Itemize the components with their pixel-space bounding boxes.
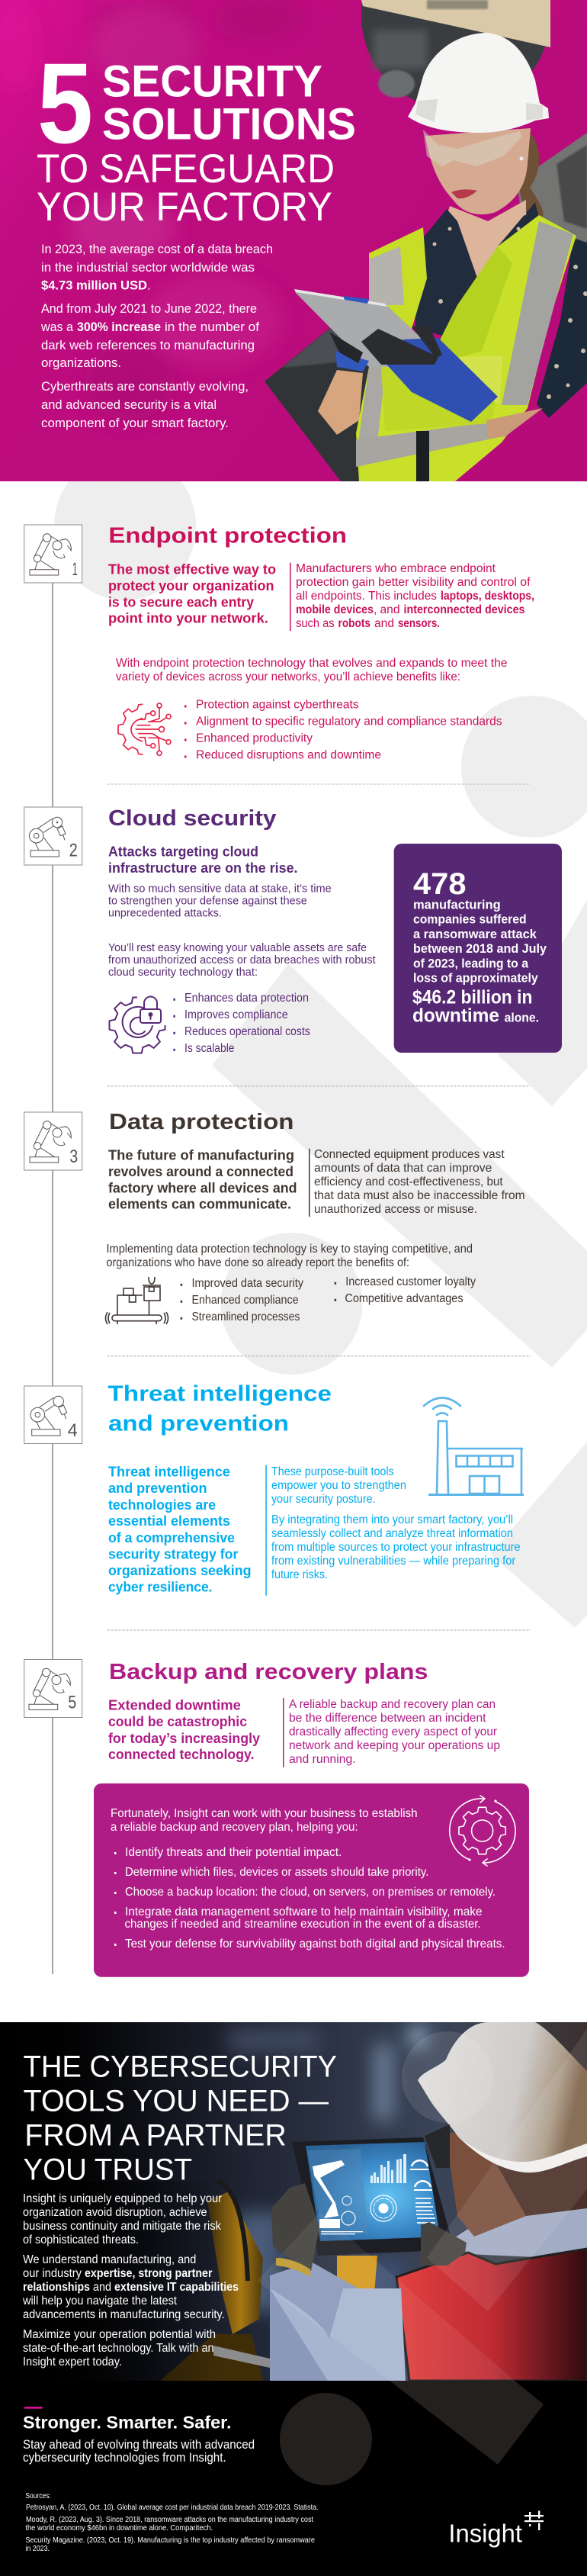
description: and running. <box>289 1753 356 1766</box>
panel: backup plan: Integrate data management software to help maintain visibility, make <box>125 1905 483 1918</box>
description <box>271 1465 521 1581</box>
lead text: revolves around a connected <box>108 1164 294 1179</box>
footer body text: organization avoid disruption, achieve <box>23 2206 207 2219</box>
description: sensors. <box>398 617 440 630</box>
helmet <box>408 33 549 133</box>
description: all endpoints. This includes <box>296 590 437 603</box>
footer body text: We understand manufacturing, and <box>23 2253 196 2266</box>
description: from multiple sources to protect your infrastructure <box>271 1541 521 1554</box>
tagline: cybersecurity technologies from Insight. <box>23 2450 226 2465</box>
hero title: YOUR FACTORY <box>37 185 332 230</box>
Insight logo: Insight <box>448 2520 522 2548</box>
description: protection gain better visibility and control of <box>296 576 531 589</box>
footer title: TOOLS YOU NEED — <box>23 2085 329 2118</box>
description: your security posture. <box>271 1493 376 1506</box>
background shapes <box>54 452 587 1628</box>
lead text: point into your network. <box>108 611 268 626</box>
panel: backup plan: a reliable backup and recovery plan, helping you: <box>111 1821 358 1834</box>
lead text: organizations seeking <box>108 1563 252 1578</box>
lead text: for today’s increasingly <box>108 1731 260 1746</box>
hero intro text: and advanced security is a vital <box>41 397 217 412</box>
section: endpoint protection <box>108 524 534 762</box>
forearms <box>318 370 363 435</box>
benefits list: Enhanced compliance <box>192 1294 299 1307</box>
description: , <box>374 603 377 616</box>
step 2 marker <box>24 807 82 865</box>
description: to strengthen your defense against these <box>108 895 307 908</box>
footer background <box>0 2022 587 2576</box>
hero title: SECURITY <box>102 56 322 107</box>
description: Manufacturers who embrace endpoint <box>296 562 496 575</box>
description: mobile devices <box>296 603 374 616</box>
lead text <box>108 562 276 626</box>
tagline: Stronger. Smarter. Safer. <box>23 2412 232 2432</box>
panel: backup plan: Test your defense for survivability against both digital and physical threats. <box>125 1938 505 1950</box>
vest and shirt <box>453 2207 587 2259</box>
panel: backup plan: Determine which files, devices or assets should take priority. <box>125 1866 428 1879</box>
hero title: SOLUTIONS <box>102 99 356 150</box>
footer body text: advancements in manufacturing security. <box>23 2308 225 2321</box>
stat callout: manufacturing <box>413 897 501 912</box>
hero photo: worker <box>294 33 587 481</box>
benefits intro <box>116 657 508 683</box>
sunglasses <box>425 2124 450 2168</box>
footer body text: relationships <box>23 2281 90 2294</box>
footer body text: expertise, strong partner <box>85 2267 212 2280</box>
tagline <box>23 2407 255 2465</box>
description: efficiency and cost-effectiveness, but <box>314 1175 503 1188</box>
lead text <box>108 844 297 876</box>
footer title: THE CYBERSECURITY <box>23 2050 337 2084</box>
lead text: Threat intelligence <box>108 1465 230 1480</box>
sleeve <box>537 238 587 418</box>
description: and <box>374 617 394 630</box>
yellow robot <box>160 2179 377 2381</box>
hero texture <box>69 0 296 415</box>
sources: Moody, R. (2023, Aug. 3). Since 2018, ransomware attacks on the manufacturing industry cost <box>26 2516 313 2524</box>
face <box>425 128 531 214</box>
benefits list: Competitive advantages <box>345 1292 464 1305</box>
lead text <box>108 1698 260 1762</box>
tablet <box>294 289 421 367</box>
stat callout: 478 <box>413 867 467 901</box>
panel: backup plan: Choose a backup location: the cloud, on servers, on premises or remotely. <box>125 1886 496 1899</box>
stat callout: companies suffered <box>413 912 527 927</box>
lead text: security strategy for <box>108 1547 238 1562</box>
shirt <box>415 209 477 336</box>
panel: backup plan: changes if needed and streamline execution in the event of a disaster. <box>125 1918 481 1931</box>
hero intro text: Cyberthreats are constantly evolving, <box>41 379 249 394</box>
description: robots <box>338 617 370 630</box>
heading <box>108 1382 332 1436</box>
description: Connected equipment produces vast <box>314 1148 505 1161</box>
section: threat intelligence and prevention <box>108 1382 521 1596</box>
benefits list: Reduces operational costs <box>184 1025 310 1038</box>
hero intro text: in the number of <box>165 320 259 334</box>
stat callout: alone. <box>505 1010 539 1024</box>
step 4 marker <box>24 1386 82 1443</box>
hair <box>520 133 543 217</box>
lead text: elements can communicate. <box>108 1197 291 1212</box>
heading: Data protection <box>109 1110 294 1134</box>
heading: and prevention <box>108 1412 289 1436</box>
lead text: is to secure each entry <box>108 595 254 610</box>
section: backup and recovery plans <box>108 1660 500 1767</box>
gloves <box>335 351 369 371</box>
lead text <box>108 1148 297 1212</box>
step 4 marker: 4 <box>68 1420 78 1441</box>
stat callout: of 2023, leading to a <box>413 957 528 971</box>
benefits list: Reduced disruptions and downtime <box>196 749 381 762</box>
benefits intro: With endpoint protection technology that evolves and expands to meet the <box>116 657 508 670</box>
benefits intro: variety of devices across your networks, you’ll achieve benefits like: <box>116 671 460 683</box>
vest <box>356 227 427 481</box>
description: laptops, desktops, <box>441 590 534 603</box>
footer body text <box>22 2192 239 2369</box>
hero intro text: $4.73 million USD <box>41 278 147 293</box>
panel: backup plan <box>94 1783 529 1977</box>
hero intro text: . <box>147 278 151 293</box>
sleeve <box>270 2262 406 2381</box>
step 1 marker <box>24 525 82 583</box>
description: You’ll rest easy knowing your valuable assets are safe <box>108 941 367 954</box>
step 5 marker <box>24 1660 82 1718</box>
description: unauthorized access or misuse. <box>314 1203 477 1216</box>
hero intro text: And from July 2021 to June 2022, there <box>41 301 257 316</box>
lead text: essential elements <box>108 1513 230 1529</box>
robot arm icon <box>32 1397 67 1436</box>
footer title <box>23 2050 337 2187</box>
hero intro text: component of your smart factory. <box>41 416 229 430</box>
benefits list <box>184 699 502 762</box>
hero intro text: in the industrial sector worldwide was <box>41 260 255 275</box>
hero intro text: dark web references to manufacturing <box>41 338 255 352</box>
description: and <box>380 603 399 616</box>
footer decorative shapes <box>280 2381 544 2485</box>
footer title: FROM A PARTNER <box>24 2119 287 2153</box>
robot arm icon <box>30 1124 71 1163</box>
description: Implementing data protection technology is key to staying competitive, and <box>107 1243 473 1256</box>
stat callout: downtime <box>412 1005 499 1026</box>
hero title: TO SAFEGUARD <box>37 146 335 191</box>
blurred factory background <box>229 2024 425 2311</box>
step 3 marker <box>24 1112 82 1170</box>
helmet <box>418 2022 587 2172</box>
robot arm icon <box>29 1671 70 1710</box>
benefits list: Is scalable <box>184 1042 235 1055</box>
sources: the world economy $46bn in downtime alone. Comparitech. <box>25 2524 213 2533</box>
step 5 marker: 5 <box>68 1692 76 1713</box>
icon: circuit gear <box>118 703 171 755</box>
hero intro text <box>40 242 273 430</box>
tablet <box>292 2137 450 2256</box>
benefits list: Improves compliance <box>184 1008 288 1021</box>
sources: Security Magazine. (2023, Oct. 19). Manufacturing is the top industry affected by ransomware <box>25 2536 315 2545</box>
sources: in 2023. <box>25 2545 50 2553</box>
lead text: connected technology. <box>108 1747 255 1762</box>
benefits list: Improved data security <box>192 1277 303 1290</box>
robot arm icon <box>30 818 66 857</box>
description: that data must also be inaccessible from <box>314 1189 525 1202</box>
benefits list: Enhances data protection <box>184 992 309 1005</box>
hero banner <box>0 0 587 481</box>
footer body text: of sophisticated threats. <box>23 2233 139 2246</box>
description: seamlessly collect and analyze threat information <box>271 1527 513 1540</box>
lead text: infrastructure are on the rise. <box>108 860 297 876</box>
footer body text: Insight expert today. <box>23 2356 122 2369</box>
footer photo: worker with tablet <box>91 2022 587 2381</box>
stat callout <box>394 844 562 1053</box>
benefits list: Protection against cyberthreats <box>196 699 359 712</box>
hero intro text: In 2023, the average cost of a data breach <box>41 242 273 256</box>
hero title <box>37 39 356 230</box>
robot arm icon <box>30 536 71 575</box>
description <box>296 562 534 630</box>
sources: Petrosyan, A. (2023, Oct. 10). Global average cost per industrial data breach 2019-2023. Statista. <box>26 2504 319 2512</box>
footer body text: and <box>93 2281 111 2294</box>
description: network and keeping your operations up <box>289 1739 500 1752</box>
description <box>107 1148 525 1269</box>
heading: Endpoint protection <box>108 524 347 548</box>
description: organizations who have done so already report the benefits of: <box>107 1256 409 1269</box>
footer body text: Maximize your operation potential with <box>23 2328 216 2341</box>
benefits list <box>173 992 310 1055</box>
heading: Threat intelligence <box>108 1382 332 1407</box>
tablet screen graphics <box>313 2154 435 2234</box>
lead text <box>108 1465 252 1595</box>
Insight logo <box>448 2511 544 2548</box>
footer body text: our industry <box>23 2267 82 2280</box>
lead text: factory where all devices and <box>108 1181 297 1196</box>
sources: Sources: <box>25 2492 51 2500</box>
footer body text: extensive IT capabilities <box>114 2281 239 2294</box>
description: such as <box>296 617 335 630</box>
hero photo: background panels <box>265 0 587 481</box>
stat callout: $46.2 billion in <box>412 987 532 1008</box>
description: By integrating them into your smart factory, you’ll <box>271 1513 513 1526</box>
footer title: YOU TRUST <box>23 2153 192 2187</box>
description: be the difference between an incident <box>289 1712 486 1725</box>
gloves <box>271 2183 319 2271</box>
hero intro text: organizations. <box>41 355 121 370</box>
lead text: of a comprehensive <box>108 1530 235 1545</box>
sources <box>25 2492 319 2553</box>
icon: conveyor <box>105 1277 168 1324</box>
translucent overlay shapes <box>257 2029 587 2381</box>
icon: connected factory <box>424 1397 524 1495</box>
timeline line <box>52 583 53 1974</box>
step 1 marker: 1 <box>72 559 78 580</box>
glasses <box>423 130 521 166</box>
footer body text: business continuity and mitigate the risk <box>23 2220 221 2233</box>
lead text: Attacks targeting cloud <box>108 844 258 860</box>
tagline: Stay ahead of evolving threats with advanced <box>23 2437 255 2452</box>
stat callout: between 2018 and July <box>413 941 547 956</box>
description: A reliable backup and recovery plan can <box>289 1698 496 1711</box>
hero intro text: 300% increase <box>77 320 161 334</box>
benefits list: Enhanced productivity <box>196 732 313 745</box>
description: empower you to strengthen <box>271 1479 406 1492</box>
neck <box>450 2133 528 2237</box>
description: cloud security technology that: <box>108 966 258 979</box>
step 3 marker: 3 <box>69 1146 78 1167</box>
description <box>289 1698 500 1766</box>
lead text: cyber resilience. <box>108 1580 212 1595</box>
footer body text: state-of-the-art technology. Talk with an <box>23 2342 213 2355</box>
lead text: The most effective way to <box>108 562 276 577</box>
description <box>108 883 376 979</box>
footer body text: will help you navigate the latest <box>22 2295 178 2307</box>
lead text: technologies are <box>108 1497 216 1513</box>
description: amounts of data that can improve <box>314 1162 492 1175</box>
description: With so much sensitive data at stake, it’s time <box>108 883 332 896</box>
benefits list: Alignment to specific regulatory and compliance standards <box>196 716 502 728</box>
section: data protection <box>107 1110 525 1323</box>
description: interconnected devices <box>404 603 524 616</box>
lead text: and prevention <box>108 1481 207 1496</box>
icon: gear with lock <box>110 995 166 1053</box>
description: from unauthorized access or data breaches with robust <box>108 954 376 966</box>
heading: Cloud security <box>108 806 276 831</box>
stat callout: loss of approximately <box>413 971 538 986</box>
step 2 marker: 2 <box>69 841 78 861</box>
panel: backup plan: Fortunately, Insight can work with your business to establish <box>111 1807 418 1820</box>
neck and chest skin <box>448 200 526 277</box>
footer body text: Insight is uniquely equipped to help your <box>23 2192 222 2205</box>
description: from existing vulnerabilities — while preparing for <box>271 1555 515 1568</box>
description: unprecedented attacks. <box>108 907 222 920</box>
benefits list: Streamlined processes <box>192 1311 300 1323</box>
description: drastically affecting every aspect of your <box>289 1725 497 1738</box>
lead text: could be catastrophic <box>108 1714 247 1729</box>
icon: recovery gear <box>450 1796 515 1866</box>
hero title: 5 <box>37 39 93 167</box>
lead text: protect your organization <box>108 578 274 593</box>
hero intro text: was a <box>40 320 74 334</box>
stat callout: a ransomware attack <box>413 927 537 941</box>
benefits list <box>181 1275 476 1323</box>
description: future risks. <box>271 1568 328 1581</box>
lead text: Extended downtime <box>108 1698 241 1713</box>
lead text: The future of manufacturing <box>108 1148 294 1163</box>
heading: Backup and recovery plans <box>109 1660 428 1684</box>
description: These purpose-built tools <box>271 1465 394 1478</box>
section: cloud security <box>108 806 376 1055</box>
panel: backup plan: Identify threats and their potential impact. <box>125 1846 342 1859</box>
benefits list: Increased customer loyalty <box>345 1275 476 1288</box>
